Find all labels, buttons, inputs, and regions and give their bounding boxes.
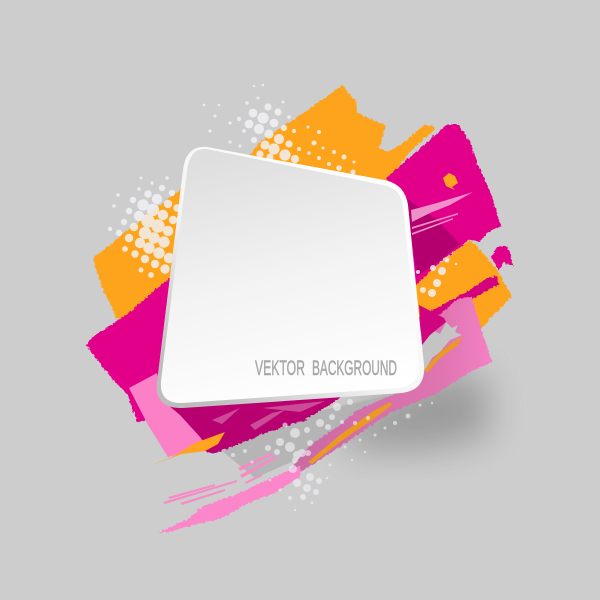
orange stroke: left xyxy=(93,185,200,320)
paper card xyxy=(157,147,424,408)
card caption xyxy=(255,357,397,380)
thin pink streaks xyxy=(412,213,458,235)
light pink stroke: left xyxy=(129,373,207,457)
orange stroke: top xyxy=(245,85,436,190)
orange streak xyxy=(146,432,225,467)
caption word: vektor: VEKTOR xyxy=(255,357,305,380)
halftone dots xyxy=(108,84,457,511)
orange splatter on pink xyxy=(308,336,462,464)
diagonal shadow strip xyxy=(222,393,400,478)
magenta stroke: top right xyxy=(386,124,501,285)
orange stroke: right xyxy=(412,240,512,340)
halftone cluster: left xyxy=(108,177,180,277)
magenta stroke: left xyxy=(86,277,185,422)
soft drop shadow xyxy=(340,375,490,450)
halftone cluster: top xyxy=(203,84,298,162)
light pink stroke: right xyxy=(290,297,492,478)
grey notch on pink xyxy=(420,322,462,372)
caption word: background: BACKGROUND xyxy=(312,357,397,380)
card shadow on magenta xyxy=(406,198,460,276)
pink streak: thin dashes xyxy=(163,480,237,505)
pink streaks on magenta xyxy=(411,192,473,222)
card face xyxy=(161,149,419,403)
magenta bar on orange xyxy=(418,276,499,332)
pink streak: short dashes xyxy=(238,452,277,484)
magenta splash xyxy=(491,246,513,270)
translucent pink marks under card xyxy=(212,401,325,430)
halftone cluster: right xyxy=(416,258,457,297)
orange splash on magenta xyxy=(443,173,458,190)
halftone cluster: bottom xyxy=(231,399,433,511)
magenta patch near card xyxy=(419,305,446,345)
brush strokes xyxy=(86,85,513,533)
pink streak: lower xyxy=(157,466,300,533)
magenta band: under card xyxy=(170,395,345,453)
halftone cluster: orange top xyxy=(297,126,356,174)
card edge xyxy=(157,147,424,408)
